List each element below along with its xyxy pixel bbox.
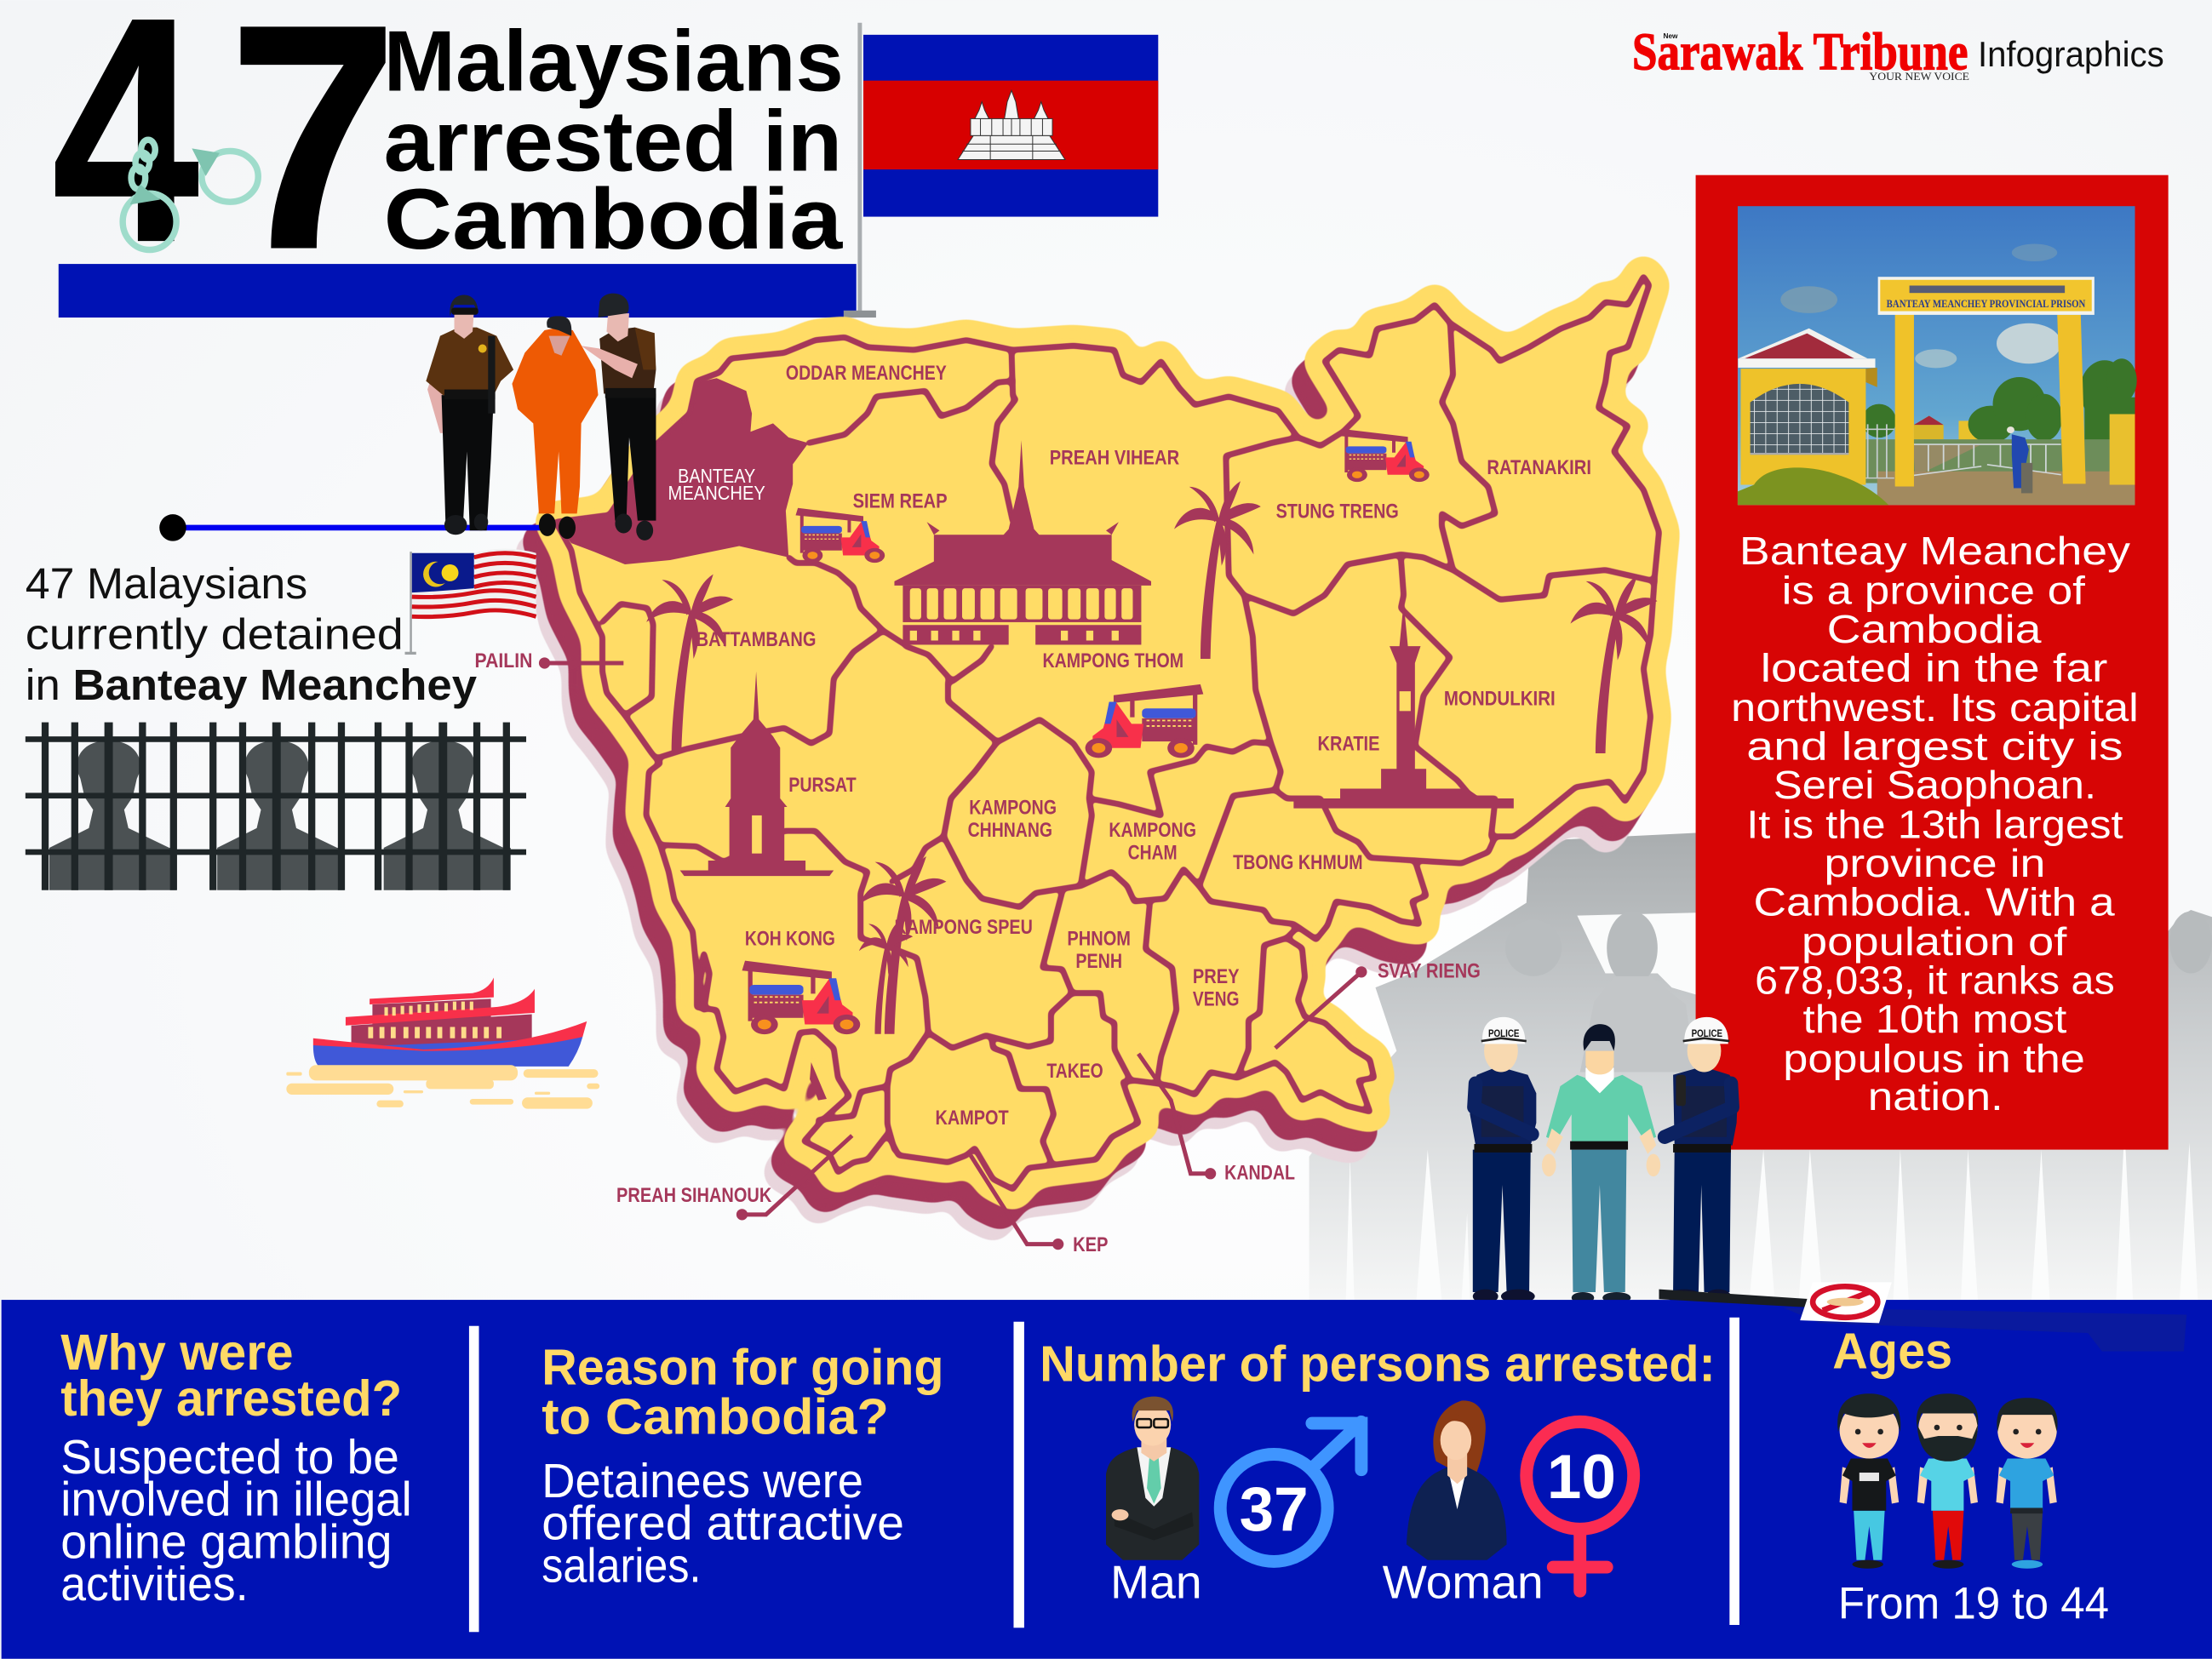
callout: detained text bbox=[26, 559, 477, 709]
shadow and baton sign bbox=[1659, 1282, 2186, 1352]
fact text: nation. bbox=[1868, 1074, 2003, 1118]
province labels: SVAY RIENG bbox=[1378, 959, 1481, 982]
panel: reason for going: Detainees were bbox=[542, 1454, 863, 1507]
title number 47 bbox=[52, 0, 398, 315]
panel: number of persons arrested bbox=[1040, 1335, 1716, 1609]
panel: ages: Ages bbox=[1832, 1322, 1952, 1379]
crowd silhouette background bbox=[1309, 832, 2212, 1301]
icon: boy three bbox=[1996, 1398, 2058, 1569]
icon: male symbol with 37: 37 bbox=[1240, 1475, 1309, 1544]
arrest group: two officers and prisoner bbox=[426, 294, 656, 541]
panel: number of persons arrested: Number of persons arrested: bbox=[1040, 1335, 1716, 1392]
panel: reason for going: offered attractive bbox=[542, 1496, 904, 1550]
prisoner silhouettes bbox=[49, 741, 511, 890]
province labels: PENH bbox=[1075, 950, 1122, 973]
fact text: the 10th most bbox=[1803, 997, 2066, 1041]
arrest group: police with suspect bbox=[1470, 1017, 1738, 1303]
province labels: KAMPONG bbox=[969, 796, 1057, 819]
panel: why were they arrested bbox=[60, 1324, 412, 1610]
province labels: PURSAT bbox=[788, 774, 857, 797]
title: Malaysians bbox=[384, 14, 844, 109]
panel: ages bbox=[1832, 1322, 2109, 1629]
icon: female symbol with 10 bbox=[1527, 1422, 1634, 1591]
icon: palm trees bbox=[633, 481, 1659, 1034]
province labels: SIEM REAP bbox=[853, 490, 948, 513]
left officer bbox=[426, 295, 513, 535]
fact text: Cambodia. With a bbox=[1754, 880, 2115, 924]
title blue bar bbox=[59, 264, 857, 317]
logo: New Sarawak Tribune: YOUR NEW VOICE bbox=[1869, 71, 1969, 83]
bars bbox=[26, 723, 526, 890]
fact text: northwest. Its capital bbox=[1731, 685, 2139, 729]
province labels: STUNG TRENG bbox=[1276, 500, 1399, 523]
province labels: PAILIN bbox=[475, 649, 532, 672]
fact text: is a province of bbox=[1782, 568, 2085, 612]
icon: Angkor Wat emblem bbox=[958, 90, 1065, 159]
prisoner bbox=[512, 316, 599, 539]
fact text: Banteay Meanchey bbox=[1739, 529, 2131, 573]
icon: male symbol with 37 bbox=[1220, 1422, 1361, 1561]
province labels: KOH KONG bbox=[745, 927, 835, 950]
province labels: CHAM bbox=[1128, 841, 1178, 864]
icon: Pursat tower bbox=[680, 672, 834, 876]
panel: why were they arrested: Suspected to be bbox=[60, 1430, 399, 1484]
province labels: PREAH SIHANOUK bbox=[616, 1184, 772, 1207]
fact text: and largest city is bbox=[1746, 724, 2123, 768]
panel: Banteay Meanchey fact box bbox=[1696, 175, 2169, 1150]
fact text: Serei Saophoan. bbox=[1774, 763, 2096, 807]
fact text: It is the 13th largest bbox=[1746, 802, 2123, 846]
province labels: BATTAMBANG bbox=[696, 628, 817, 651]
right police officer bbox=[1665, 1017, 1738, 1303]
icon: central temple bbox=[894, 440, 1151, 644]
callout lines bbox=[539, 657, 1367, 1250]
fact text: population of bbox=[1802, 919, 2066, 964]
panel: reason for going: to Cambodia? bbox=[542, 1387, 889, 1444]
jail bars with three prisoners bbox=[26, 723, 526, 890]
callout: detained text: in Banteay Meanchey bbox=[26, 661, 477, 709]
fact text: located in the far bbox=[1761, 646, 2107, 690]
callout: detained text: currently detained bbox=[26, 609, 404, 658]
province labels: BANTEAY bbox=[678, 465, 755, 487]
icon: Kratie tower bbox=[1293, 603, 1514, 809]
Cambodia flag bbox=[863, 35, 1158, 217]
province labels: KAMPONG SPEU bbox=[894, 916, 1033, 939]
province labels: KAMPONG THOM bbox=[1042, 649, 1183, 672]
title: arrested in bbox=[384, 94, 842, 190]
prison photo: BANTEAY MEANCHEY PROVINCIAL PRISON bbox=[1887, 298, 2086, 310]
flagpole bbox=[844, 23, 876, 317]
icon: man bbox=[1106, 1397, 1199, 1560]
province labels: VENG bbox=[1193, 988, 1240, 1011]
icon: female symbol with 10: 10 bbox=[1547, 1443, 1616, 1512]
fact text: Cambodia bbox=[1827, 607, 2042, 651]
panel: why were they arrested: online gambling bbox=[60, 1514, 393, 1568]
province labels: PREY bbox=[1193, 965, 1240, 988]
fact text bbox=[1731, 529, 2139, 1118]
province labels: ODDAR MEANCHEY bbox=[786, 362, 947, 385]
icon: handcuffs bbox=[123, 140, 258, 250]
province labels bbox=[475, 362, 1591, 1256]
callout: detained text: 47 Malaysians bbox=[26, 559, 307, 608]
panel: reason for going: Reason for going bbox=[542, 1338, 943, 1395]
province labels: KAMPOT bbox=[936, 1107, 1009, 1130]
province labels: TBONG KHMUM bbox=[1233, 851, 1363, 874]
title: Cambodia bbox=[384, 172, 843, 267]
province labels: TAKEO bbox=[1046, 1060, 1103, 1083]
province labels: KEP bbox=[1073, 1233, 1108, 1256]
fact text: 678,033, it ranks as bbox=[1755, 958, 2115, 1003]
province labels: KRATIE bbox=[1318, 733, 1379, 756]
province borders bbox=[556, 277, 1659, 1189]
icon: woman bbox=[1407, 1400, 1507, 1560]
icon: tuk tuks bbox=[742, 429, 1430, 1034]
panel: why were they arrested: Why were bbox=[60, 1324, 294, 1381]
panel: number of persons arrested: Man bbox=[1110, 1557, 1202, 1609]
panel: reason for going bbox=[542, 1338, 943, 1592]
title bbox=[384, 14, 844, 267]
province labels: KAMPONG bbox=[1109, 819, 1196, 842]
panel: number of persons arrested: Woman bbox=[1383, 1557, 1544, 1609]
Banteay Meanchey province bbox=[556, 378, 808, 564]
bottom band bbox=[2, 1300, 2212, 1659]
dividers bbox=[469, 1318, 1739, 1632]
icon: Malaysia flag bbox=[405, 549, 536, 655]
left police officer: POLICE bbox=[1488, 1027, 1519, 1039]
map of Cambodia bbox=[536, 277, 1659, 1220]
right police officer: POLICE bbox=[1692, 1027, 1722, 1039]
province labels: PHNOM bbox=[1067, 927, 1131, 950]
fact text: populous in the bbox=[1783, 1036, 2085, 1080]
fact text: province in bbox=[1824, 841, 2045, 885]
panel: why were they arrested: involved in illegal bbox=[60, 1473, 412, 1526]
prison photo bbox=[1738, 206, 2137, 505]
panel: why were they arrested: they arrested? bbox=[60, 1370, 402, 1427]
province labels: CHHNANG bbox=[968, 819, 1052, 842]
right officer bbox=[582, 294, 656, 541]
province labels: PREAH VIHEAR bbox=[1050, 446, 1179, 469]
logo: New Sarawak Tribune: Infographics bbox=[1978, 35, 2164, 74]
panel: ages: From 19 to 44 bbox=[1838, 1579, 2109, 1629]
province labels: MEANCHEY bbox=[668, 482, 765, 504]
blue connector line bbox=[159, 514, 550, 541]
suspect bbox=[1542, 1024, 1660, 1303]
province labels: KANDAL bbox=[1224, 1161, 1295, 1184]
icon: boy two bbox=[1917, 1393, 1978, 1569]
logo: New Sarawak Tribune: New bbox=[1663, 32, 1678, 40]
logo: New Sarawak Tribune: Sarawak Tribune bbox=[1632, 21, 1968, 81]
left police officer bbox=[1470, 1017, 1536, 1303]
province labels: MONDULKIRI bbox=[1444, 688, 1556, 711]
panel: reason for going: salaries. bbox=[542, 1538, 701, 1592]
province labels: RATANAKIRI bbox=[1487, 456, 1591, 479]
panel: why were they arrested: activities. bbox=[60, 1557, 249, 1610]
icon: boy one bbox=[1837, 1393, 1900, 1569]
icon: ferry boat bbox=[286, 977, 599, 1109]
